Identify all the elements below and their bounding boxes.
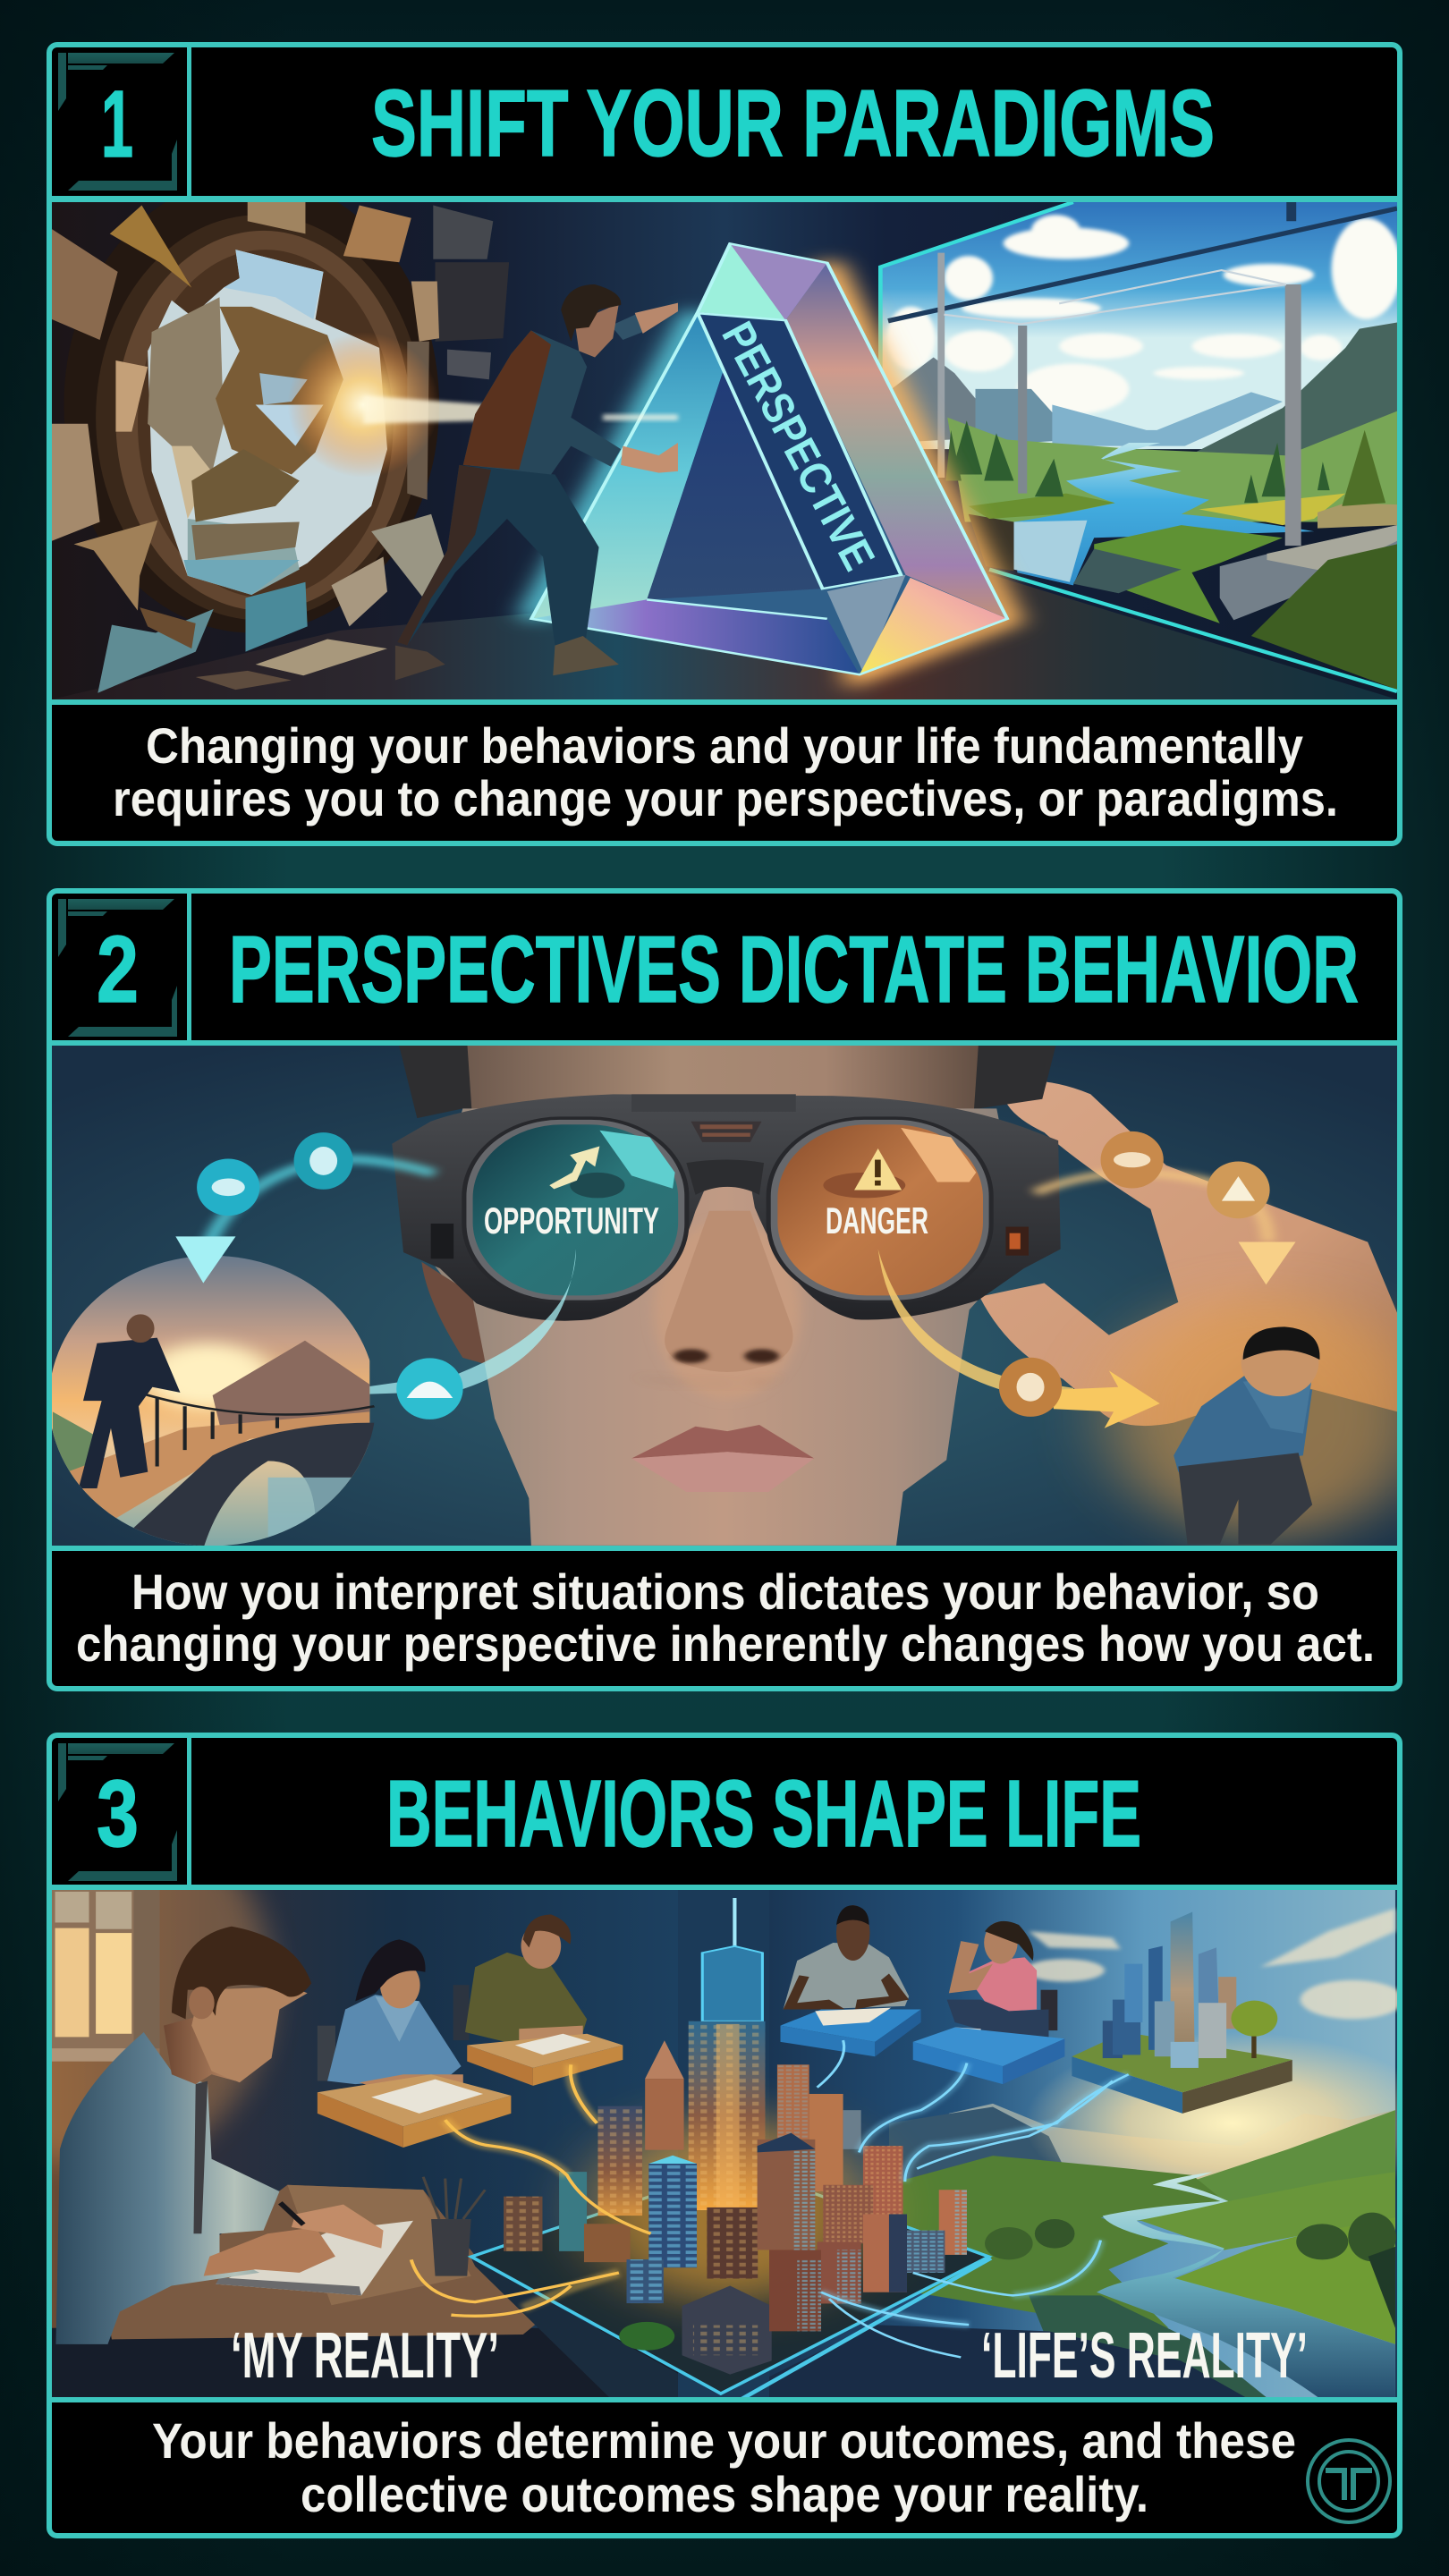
panel 3 frame bbox=[49, 1735, 1400, 2536]
icon: eye node bbox=[1101, 1131, 1164, 1189]
sky and valley landscape bbox=[769, 1889, 1440, 2399]
panel 3 illustration bbox=[0, 1804, 1440, 2406]
panel 3 caption: collective outcomes shape your reality. bbox=[301, 2466, 1148, 2522]
panel 3: behaviors shape life bbox=[0, 1735, 1440, 2536]
panel 1 frame bbox=[49, 45, 1400, 843]
panel 1 number box bbox=[58, 53, 177, 191]
opportunity path: sunrise bridge bbox=[37, 1132, 463, 1548]
panel 1 number box: 1 bbox=[101, 72, 133, 177]
panel 2 illustration bbox=[37, 1045, 1423, 1548]
panel 1 caption: Changing your behaviors and your life fundamentally bbox=[146, 717, 1303, 774]
panel 2 number box: 2 bbox=[97, 917, 139, 1022]
panel 3 number box: 3 bbox=[97, 1761, 139, 1867]
panel 3 caption bbox=[52, 2397, 1397, 2522]
panel 2 caption: How you interpret situations dictates your behavior, so bbox=[131, 1563, 1319, 1620]
panel 1 illustration bbox=[52, 177, 1402, 699]
light beam bbox=[287, 332, 678, 478]
man pushing prism bbox=[395, 284, 678, 681]
icon: bridge node bbox=[396, 1358, 463, 1419]
icon: danger triangle bbox=[854, 1148, 902, 1190]
miniature city with glowing tower bbox=[471, 1898, 989, 2394]
floating island with city bbox=[1072, 1911, 1292, 2114]
panel 2 number box bbox=[58, 899, 177, 1037]
base edge of miniature city bbox=[471, 2258, 678, 2399]
panel 3 caption: Your behaviors determine your outcomes, and these bbox=[152, 2412, 1296, 2469]
icon: opportunity arrow bbox=[549, 1147, 599, 1189]
panel 1 caption bbox=[52, 699, 1397, 826]
city blocks and blue streams on the right bbox=[729, 2040, 1129, 2406]
icon: worry node bbox=[999, 1358, 1062, 1417]
man writing at wooden desk bbox=[453, 1914, 623, 2086]
man reading at blue platform bbox=[780, 1905, 921, 2056]
man writing in foreground bbox=[55, 1927, 384, 2344]
shattered wooden portal bbox=[52, 177, 509, 693]
panel 1: shift your paradigms bbox=[49, 45, 1402, 843]
golden behaviour streams bbox=[411, 2064, 651, 2316]
danger path: crouching figure bbox=[999, 1131, 1423, 1544]
hand holding goggles bbox=[979, 1080, 1397, 1426]
glass prism with label bbox=[531, 243, 1007, 674]
office scene: window, desk and writers bbox=[0, 1804, 678, 2399]
logo emblem bbox=[1308, 2440, 1390, 2522]
prism label: PERSPECTIVE bbox=[712, 314, 885, 578]
lens label: opportunity: OPPORTUNITY bbox=[484, 1199, 659, 1241]
panel 1 caption: requires you to change your perspectives, or paradigms. bbox=[113, 770, 1338, 826]
panel 2 caption bbox=[52, 1546, 1397, 1672]
window onto landscape bbox=[850, 202, 1402, 691]
window with warm light bbox=[52, 1889, 160, 2062]
icon: handshake node bbox=[197, 1158, 259, 1216]
panel 2: perspectives dictate behavior bbox=[37, 891, 1423, 1689]
desk with notebook bbox=[107, 2177, 555, 2339]
woman writing at floating desk bbox=[318, 1939, 511, 2148]
panel 2 frame bbox=[49, 891, 1400, 1689]
woman sitting at blue platform bbox=[913, 1921, 1064, 2084]
label: my reality: ‘MY REALITY’ bbox=[231, 2320, 499, 2392]
icon: warning node bbox=[1207, 1162, 1270, 1218]
lens label: danger: DANGER bbox=[826, 1199, 928, 1241]
icon: people node bbox=[294, 1132, 353, 1190]
panel 3 number box bbox=[58, 1743, 177, 1881]
face with hair and goggles bbox=[358, 1045, 1073, 1546]
papers on the floor bbox=[196, 640, 387, 690]
